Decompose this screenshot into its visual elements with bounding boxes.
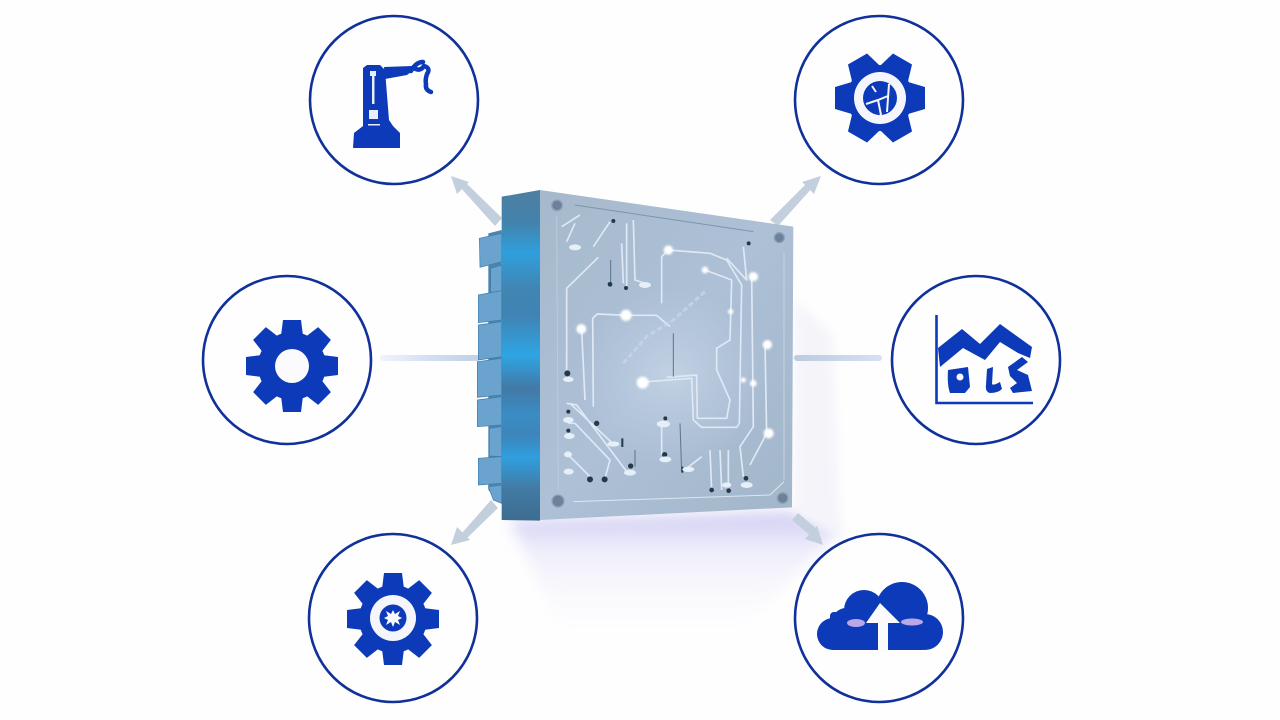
arrow: to left circle [380, 355, 480, 361]
connector fins [477, 233, 502, 503]
icon: robot arm [353, 62, 431, 148]
icon circle: pie gear [795, 16, 963, 184]
icon: eight-tooth gear [246, 320, 338, 412]
dark traces [611, 260, 682, 472]
icon: area chart [936, 315, 1033, 403]
light pads [563, 244, 753, 488]
icon: eight-tooth gear with star core [347, 573, 439, 665]
solder pads [564, 219, 751, 493]
board face [540, 190, 793, 520]
circuit board module [477, 190, 793, 521]
arrow: to bottom-left circle [451, 500, 498, 545]
icon circle: gear [203, 276, 371, 444]
screw holes [552, 200, 788, 507]
icon circle: robot arm [310, 16, 478, 184]
circuit traces [562, 215, 767, 490]
arrow: to top-right circle [770, 176, 821, 226]
arrow: to top-left circle [451, 176, 502, 226]
blue side panel [502, 190, 540, 521]
arrow: to bottom-right circle [792, 513, 823, 545]
icon circle: cloud upload [795, 534, 963, 702]
icon circle: chart with house shapes [892, 276, 1060, 444]
icon: cloud upload [817, 582, 943, 652]
icon circle: star gear [309, 534, 477, 702]
inset edge lines [557, 205, 784, 502]
arrow: to right circle [794, 355, 882, 361]
board shadow [510, 300, 840, 640]
glow [577, 287, 770, 467]
glowing nodes [576, 245, 774, 438]
fin backing [488, 230, 502, 503]
icon: six-tooth gear [835, 51, 925, 145]
